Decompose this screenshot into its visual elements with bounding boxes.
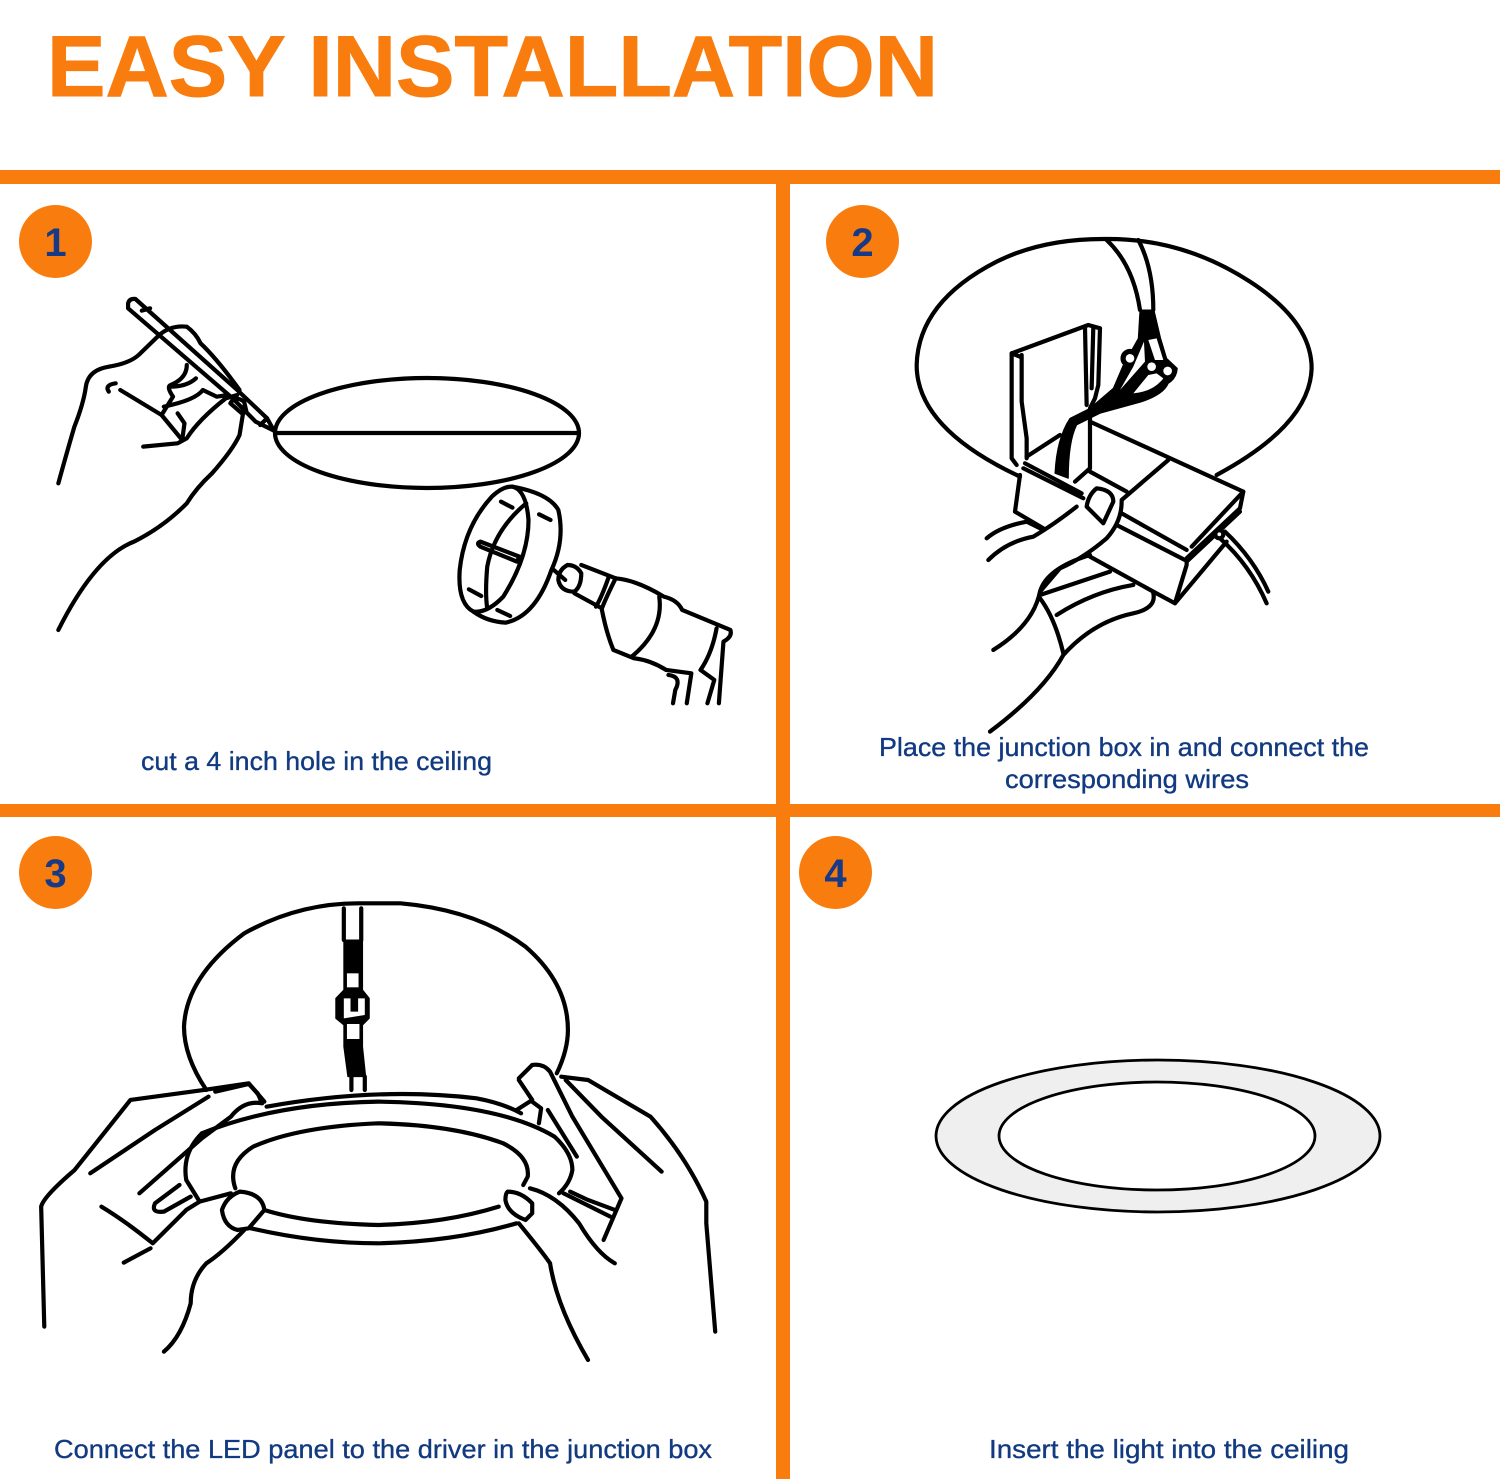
badge: number 3: 3 — [44, 852, 67, 896]
icon: hand with pencil marking ceiling — [58, 299, 274, 630]
badge: number 4: 4 — [824, 852, 847, 896]
badge: number 2: 2 — [851, 221, 874, 265]
icon: hands connecting junction box wires — [917, 239, 1312, 732]
caption: step 4: Insert the light into the ceiling — [989, 1434, 1349, 1464]
panel: step 3 connect LED panel — [0, 817, 776, 1479]
icon: hands holding LED panel with connector — [41, 903, 715, 1360]
panel: step 2 junction box — [790, 184, 1500, 804]
badge: number 1: 1 — [44, 221, 67, 265]
caption: step 2 — [879, 732, 1369, 794]
caption: step 2: Place the junction box in and connect the — [879, 732, 1369, 762]
badge: number 3 — [19, 836, 92, 909]
badge: number 2 — [826, 205, 899, 278]
badge: number 1 — [19, 205, 92, 278]
icon: marked circle on ceiling — [275, 378, 579, 488]
panel: step 1 cut hole — [0, 184, 776, 804]
caption: step 3: Connect the LED panel to the driver in the junction box — [54, 1434, 712, 1464]
caption: step 1: cut a 4 inch hole in the ceiling — [141, 746, 492, 776]
icon: hole saw drill — [459, 487, 731, 703]
title: EASY INSTALLATION — [47, 19, 938, 115]
icon: installed light ring — [936, 1060, 1380, 1212]
caption: step 2: corresponding wires — [1005, 764, 1249, 794]
panel: step 4 insert light — [790, 817, 1500, 1479]
badge: number 4 — [799, 836, 872, 909]
